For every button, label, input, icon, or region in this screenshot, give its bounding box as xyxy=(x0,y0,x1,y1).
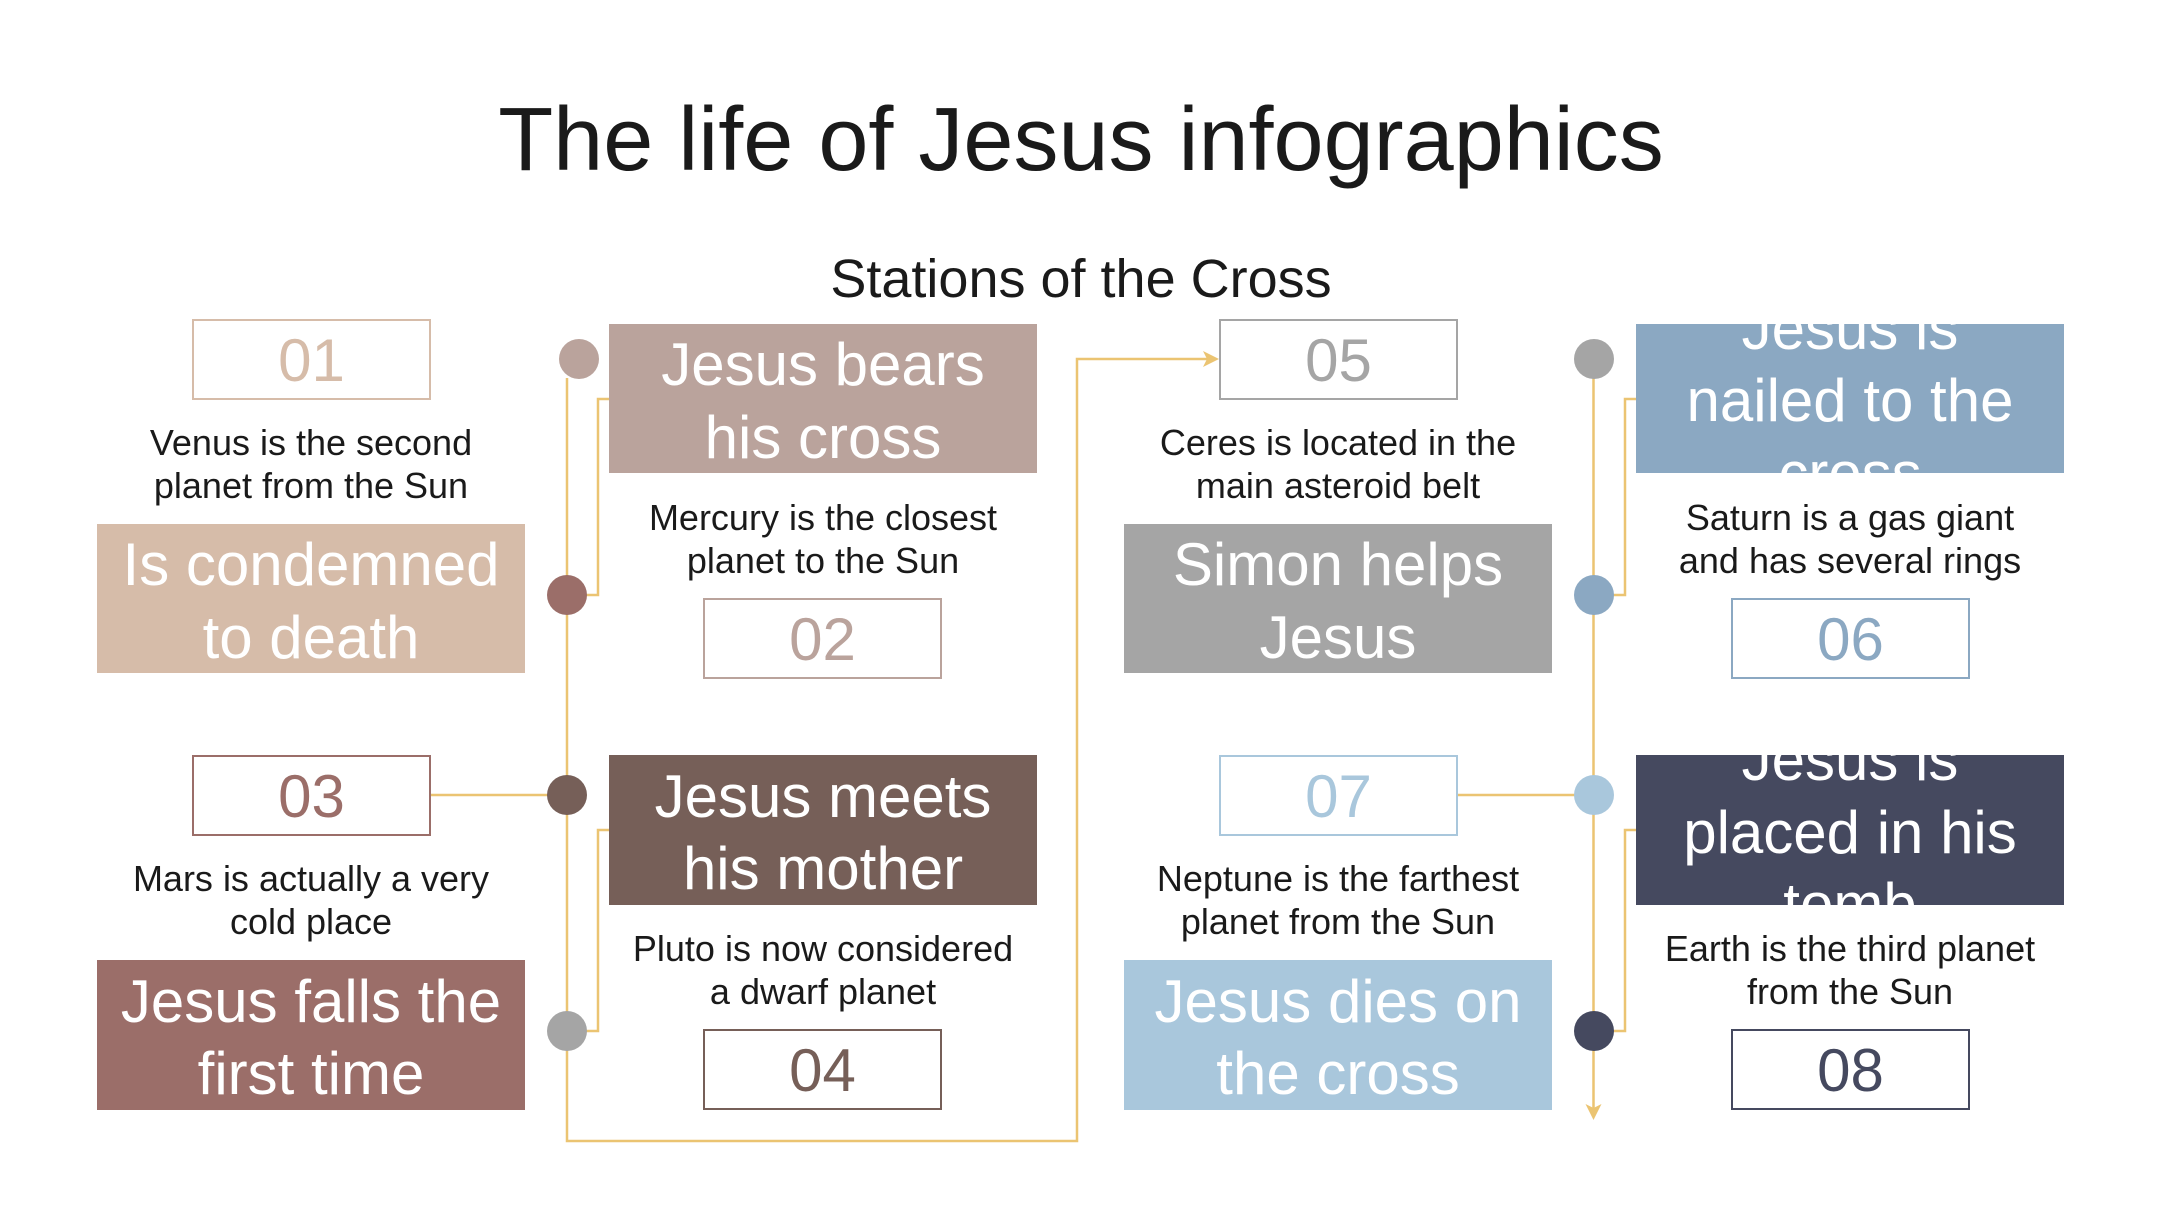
heading 04: Jesus meets his mother xyxy=(655,762,991,902)
description 02 xyxy=(649,497,997,581)
description 05: main asteroid belt xyxy=(1196,465,1480,506)
heading 07: Jesus dies on the cross xyxy=(1155,968,1521,1107)
panel: station 01 xyxy=(97,319,525,673)
description 03 xyxy=(133,858,489,942)
description 06: and has several rings xyxy=(1679,540,2021,581)
number 05: 05 xyxy=(1305,327,1372,394)
description 04 xyxy=(633,928,1013,1012)
description 01: Venus is the second xyxy=(150,422,472,463)
heading 06 xyxy=(1636,324,2064,473)
description 08: from the Sun xyxy=(1747,971,1953,1012)
heading 03: Jesus falls the first time xyxy=(121,968,501,1107)
number 02 xyxy=(703,598,942,679)
panel: station 03 xyxy=(97,755,525,1110)
timeline dot 3 xyxy=(547,775,587,815)
timeline dot 2 xyxy=(547,575,587,615)
title: The life of Jesus infographics xyxy=(498,90,1664,190)
panel: station 02 xyxy=(609,324,1037,679)
timeline dot 5 xyxy=(1574,339,1614,379)
number 04: 04 xyxy=(789,1037,856,1104)
description 06: Saturn is a gas giant xyxy=(1686,497,2014,538)
description 05 xyxy=(1160,422,1516,506)
number 01 xyxy=(192,319,431,400)
description 01: planet from the Sun xyxy=(154,465,468,506)
heading 05: Simon helps Jesus xyxy=(1173,531,1503,670)
heading 02: Jesus bears his cross xyxy=(661,331,985,470)
number 08 xyxy=(1731,1029,1970,1110)
panel: station 04 xyxy=(609,755,1037,1110)
heading 08 xyxy=(1636,755,2064,905)
description 06 xyxy=(1679,497,2021,581)
number 07: 07 xyxy=(1305,763,1372,830)
description 04: a dwarf planet xyxy=(710,971,936,1012)
timeline dot 6 xyxy=(1574,575,1614,615)
number 05 xyxy=(1219,319,1458,400)
description 04: Pluto is now considered xyxy=(633,928,1013,969)
subtitle: Stations of the Cross xyxy=(830,249,1332,309)
timeline dot 8 xyxy=(1574,1011,1614,1051)
description 03: Mars is actually a very xyxy=(133,858,489,899)
panel: station 08 xyxy=(1636,755,2064,1110)
number 01: 01 xyxy=(278,327,345,394)
description 01 xyxy=(150,422,472,506)
description 07: planet from the Sun xyxy=(1181,901,1495,942)
description 02: Mercury is the closest xyxy=(649,497,997,538)
number 06: 06 xyxy=(1817,606,1884,673)
description 05: Ceres is located in the xyxy=(1160,422,1516,463)
number 07 xyxy=(1219,755,1458,836)
panel: station 06 xyxy=(1636,324,2064,679)
description 07: Neptune is the farthest xyxy=(1157,858,1519,899)
timeline dot 7 xyxy=(1574,775,1614,815)
panel: station 07 xyxy=(1124,755,1552,1110)
number 03: 03 xyxy=(278,763,345,830)
number 02: 02 xyxy=(789,606,856,673)
description 02: planet to the Sun xyxy=(687,540,959,581)
description 08 xyxy=(1665,928,2035,1012)
timeline dot 4 xyxy=(547,1011,587,1051)
panel: station 05 xyxy=(1124,319,1552,673)
number 08: 08 xyxy=(1817,1037,1884,1104)
number 04 xyxy=(703,1029,942,1110)
description 08: Earth is the third planet xyxy=(1665,928,2035,969)
heading 01: Is condemned to death xyxy=(123,531,499,670)
description 03: cold place xyxy=(230,901,392,942)
timeline dot 1 xyxy=(559,339,599,379)
description 07 xyxy=(1157,858,1519,942)
number 03 xyxy=(192,755,431,836)
number 06 xyxy=(1731,598,1970,679)
